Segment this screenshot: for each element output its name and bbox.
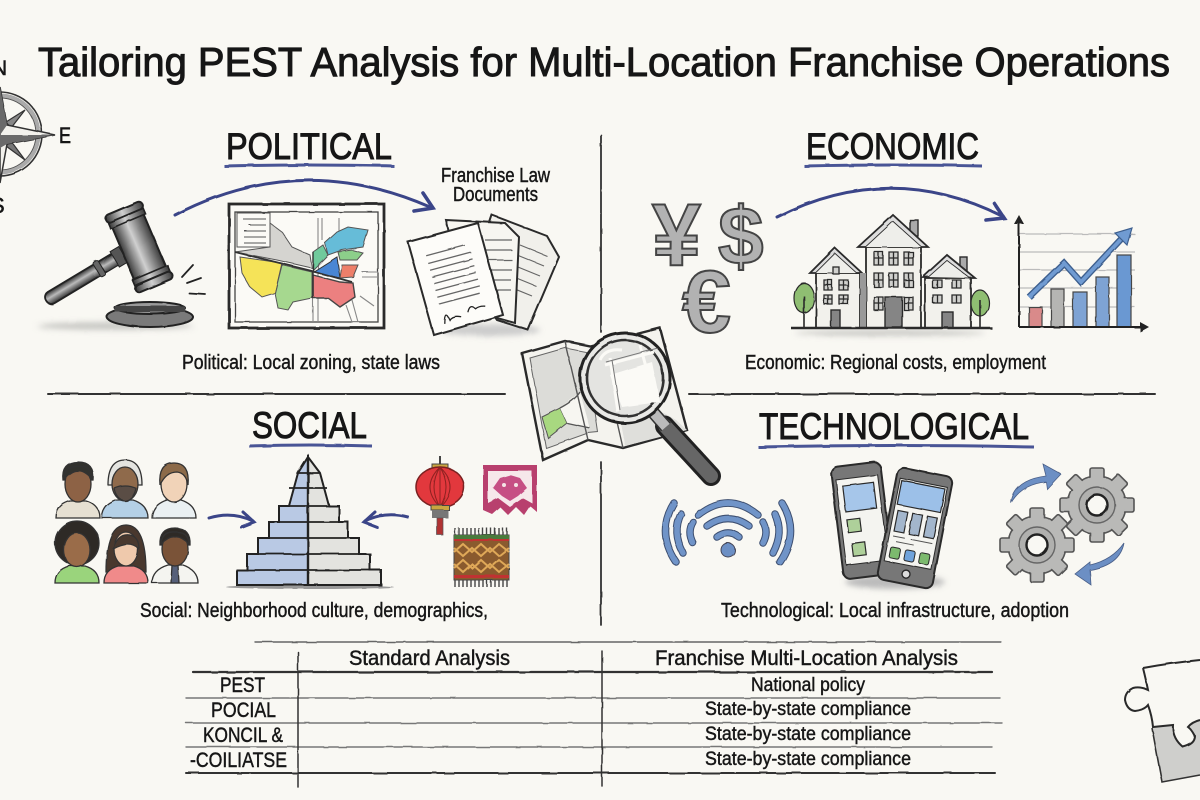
- table values: State-by-state compliance: [705, 698, 911, 720]
- table row labels: POCIAL: [211, 699, 276, 722]
- icon: town buildings: [791, 215, 992, 336]
- icon: compass: E: [59, 123, 71, 148]
- icon: gears with cycle arrows: [1000, 464, 1134, 585]
- person 5: [104, 525, 148, 583]
- person 6: [152, 528, 198, 583]
- panel: political: [37, 126, 559, 374]
- icon: magnifying glass over map: [522, 328, 711, 476]
- person 3: [152, 463, 196, 518]
- icon: paper cut: [483, 465, 537, 515]
- title: Tailoring PEST Analysis for Multi-Location Franchise Operations: [38, 39, 1170, 85]
- arrow: people to pyramid: [209, 512, 254, 527]
- caption: technological: Technological: Local infrastructure, adoption: [721, 600, 1069, 622]
- panel: economic: [652, 126, 1149, 374]
- table: standard vs multi-location analysis: [186, 642, 1002, 787]
- table row labels: -COILIATSE: [190, 749, 287, 772]
- table header: [349, 647, 958, 670]
- icon: puzzle pieces: [1125, 660, 1200, 782]
- icon: currency symbols: €: [682, 252, 731, 351]
- heading: economic: ECONOMIC: [806, 126, 979, 167]
- icon: currency symbols: $: [718, 191, 764, 282]
- caption: political: Political: Local zoning, state laws: [182, 352, 440, 374]
- icon: wifi signal: [665, 503, 791, 562]
- label: franchise law documents: Franchise Law: [441, 165, 550, 187]
- icon: woven textile: [454, 528, 509, 587]
- map: regional zoning: [229, 204, 384, 328]
- divider lines: [48, 135, 1155, 625]
- heading: technological: TECHNOLOGICAL: [759, 406, 1029, 447]
- panel: technological: [665, 406, 1134, 622]
- icon: currency symbols: ¥: [652, 185, 701, 284]
- underline: political: [224, 165, 394, 166]
- table header: Franchise Multi-Location Analysis: [655, 647, 958, 670]
- chart: demographic pyramid: [226, 457, 394, 589]
- person 1: [56, 462, 100, 518]
- icon: smartphones: [830, 461, 953, 589]
- table values: National policy: [751, 674, 865, 696]
- icon: currency symbols: [652, 185, 764, 351]
- table row labels: KONCIL &: [203, 724, 283, 747]
- chart: growth bars: [1014, 215, 1149, 332]
- caption: economic: Economic: Regional costs, employment: [745, 352, 1046, 374]
- table values: State-by-state compliance: [705, 723, 911, 745]
- arrow: economic flow: [777, 188, 1004, 220]
- caption: social: Social: Neighborhood culture, demographics,: [140, 600, 488, 622]
- label: franchise law documents: [441, 165, 550, 206]
- person 2: [102, 460, 148, 518]
- arrow: culture to pyramid: [364, 512, 408, 527]
- table row labels: PEST: [220, 674, 265, 697]
- heading: political: POLITICAL: [226, 126, 392, 167]
- arrow: political flow: [175, 180, 433, 215]
- people group: [55, 460, 198, 583]
- icon: documents: [408, 215, 559, 336]
- table row labels: [190, 674, 287, 772]
- label: franchise law documents: Documents: [453, 184, 538, 206]
- underline: social: [249, 445, 372, 446]
- underline: economic: [804, 165, 982, 166]
- heading: social: SOCIAL: [252, 405, 367, 446]
- icon: gavel: [37, 201, 205, 330]
- table grid: [186, 642, 1002, 787]
- icon: red lantern: [416, 456, 464, 535]
- table values: State-by-state compliance: [705, 748, 911, 770]
- icon: compass: [0, 57, 71, 218]
- underline: technological: [758, 446, 1034, 447]
- table header: Standard Analysis: [349, 647, 510, 670]
- panel: social: [55, 405, 537, 622]
- table values: [705, 674, 911, 770]
- person 4: [55, 521, 99, 583]
